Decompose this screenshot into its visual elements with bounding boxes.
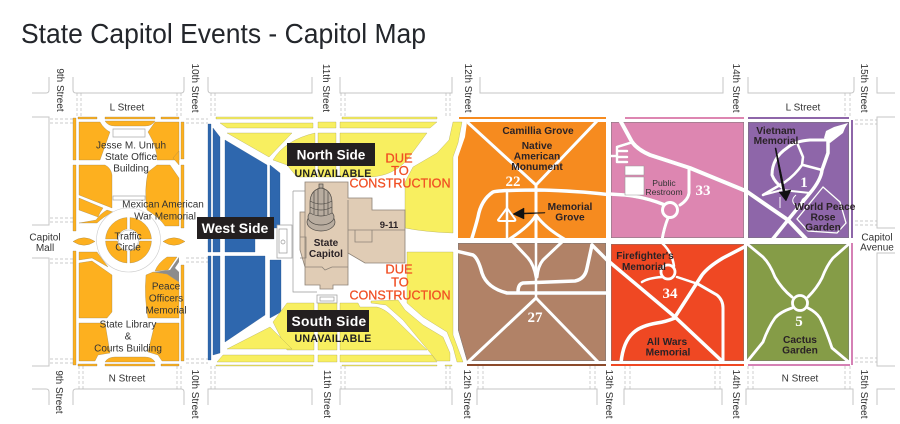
label: west block place names: Memorial: [145, 306, 187, 316]
panel: west side lawn (blue): [208, 124, 281, 360]
label: all wars memorial: Memorial: [646, 348, 691, 359]
arrow: vietnam memorial pointer: [775, 148, 791, 201]
label: memorial grove: Memorial: [548, 202, 593, 213]
number: 22: 22: [506, 174, 520, 190]
label: state capitol: State: [314, 238, 339, 249]
label: west block place names: Building: [113, 164, 149, 174]
label: cactus garden: Garden: [782, 345, 818, 356]
label: horizontal street names: Capitol: [861, 232, 893, 244]
label: north cross street names: 12th Street: [462, 64, 473, 113]
label: world peace rose garden: Rose: [811, 212, 836, 223]
label: west block place names: &: [125, 332, 132, 342]
label: west block place names: Courts Building: [94, 344, 162, 354]
label: horizontal street names: [29, 102, 894, 384]
label: south cross street names: 10th Street: [189, 370, 200, 419]
panel: capitol yellow lawns north: [216, 117, 462, 233]
label: horizontal street names: Capitol: [29, 232, 61, 244]
label: west block place names: Traffic: [114, 232, 142, 242]
building: state capitol: Capitol: [309, 249, 343, 260]
panel: pink block 33: [609, 117, 746, 240]
label: camillia grove: Camillia Grove: [502, 126, 574, 137]
label: world peace rose garden: World Peace: [795, 202, 856, 213]
label: due to construction north: TO: [391, 163, 409, 178]
label: cactus garden: Cactus: [783, 335, 817, 346]
label: west side: [197, 217, 274, 239]
label: north cross street names: [54, 64, 869, 113]
label: native american monument: Monument: [511, 162, 563, 173]
label: north side: [287, 143, 375, 166]
label: south cross street names: 12th Street: [461, 370, 472, 419]
label: 9-11: 9-11: [380, 220, 399, 231]
arrow: memorial grove pointer: [513, 208, 545, 219]
building: public restroom: [625, 166, 644, 195]
panel: capitol yellow lawns south: [216, 252, 463, 366]
label: horizontal street names: L Street: [786, 102, 821, 114]
label: firefighter's memorial: Memorial: [622, 262, 666, 273]
label: public restroom: Restroom: [645, 187, 683, 197]
building outlines: Unruh building: [113, 129, 145, 200]
label: firefighter's memorial: Firefighter's: [616, 251, 674, 262]
label: south cross street names: 15th Street: [858, 370, 869, 419]
label: north unavailable: UNAVAILABLE: [294, 168, 372, 180]
label: north side: North Side: [297, 148, 366, 162]
label: horizontal street names: L Street: [110, 102, 145, 114]
label: all wars memorial: All Wars: [647, 337, 688, 348]
building: state capitol: [300, 182, 405, 289]
label: horizontal street names: N Street: [782, 374, 819, 384]
label: south cross street names: 14th Street: [730, 370, 741, 419]
number: 34: 34: [662, 286, 678, 302]
panel: purple block 1: [746, 117, 856, 240]
label: west block place names: State Office: [105, 152, 157, 163]
label: west block place names: State Library: [100, 320, 156, 330]
label: south unavailable: UNAVAILABLE: [294, 333, 372, 345]
label: due to construction north: CONSTRUCTION: [350, 176, 450, 190]
label: west block place names: Officers: [149, 294, 183, 304]
label: north cross street names: 10th Street: [189, 64, 200, 113]
label: due to construction south: CONSTRUCTION: [350, 288, 450, 302]
label: west block place names: Circle: [115, 242, 141, 254]
label: north cross street names: 9th Street: [54, 68, 65, 112]
label: horizontal street names: Mall: [36, 243, 54, 254]
label: world peace rose garden: Garden: [805, 222, 841, 233]
label: native american monument: American: [514, 152, 560, 162]
panel: west block (orange gardens): [73, 117, 184, 366]
panel: olive block 5: [746, 243, 853, 366]
label: south side: [287, 310, 369, 332]
panel: traffic circle: [73, 208, 185, 272]
label: public restroom: Public: [652, 178, 676, 188]
label: north cross street names: 14th Street: [730, 64, 741, 113]
label: south side: South Side: [291, 314, 367, 329]
label: west block place names: War Memorial: [134, 212, 196, 222]
panel: red block 34: [606, 243, 746, 366]
label: west block place names: Mexican American: [122, 200, 204, 210]
panel: orange block 22: [456, 117, 612, 240]
icon: capitol dome: [307, 184, 335, 231]
label: west block place names: Jesse M. Unruh: [96, 140, 166, 152]
label: south cross street names: 13th Street: [603, 370, 614, 419]
icon: peace officers memorial plaza: [153, 257, 179, 282]
label: due to construction south: DUE: [385, 262, 413, 276]
label: south cross street names: 9th Street: [53, 370, 64, 414]
number: 5: 5: [795, 314, 803, 330]
title: State Capitol Events - Capitol Map: [21, 18, 426, 49]
number: 27: 27: [528, 310, 543, 326]
plaza: west steps: [277, 191, 337, 303]
label: north cross street names: 11th Street: [320, 64, 331, 112]
label: west side: West Side: [202, 220, 269, 236]
street block outlines: [32, 77, 895, 405]
label: horizontal street names: Avenue: [860, 242, 894, 254]
label: west block place names: Peace: [152, 282, 181, 292]
label: memorial grove: Grove: [555, 212, 585, 224]
panel: brown block 27: [456, 241, 610, 366]
label: south cross street names: [53, 370, 869, 419]
number: 1: 1: [800, 175, 808, 191]
number: 33: 33: [696, 183, 710, 199]
label: vietnam memorial: Memorial: [754, 136, 799, 147]
label: native american monument: Native: [522, 141, 553, 152]
label: due to construction north: DUE: [385, 150, 413, 166]
label: vietnam memorial: Vietnam: [756, 126, 796, 137]
label: due to construction south: TO: [391, 274, 409, 290]
dashed street crossings: [50, 93, 877, 389]
label: south cross street names: 11th Street: [321, 370, 332, 418]
label: horizontal street names: N Street: [109, 374, 146, 384]
label: west block place names: [94, 140, 204, 354]
label: north cross street names: 15th Street: [858, 64, 869, 113]
